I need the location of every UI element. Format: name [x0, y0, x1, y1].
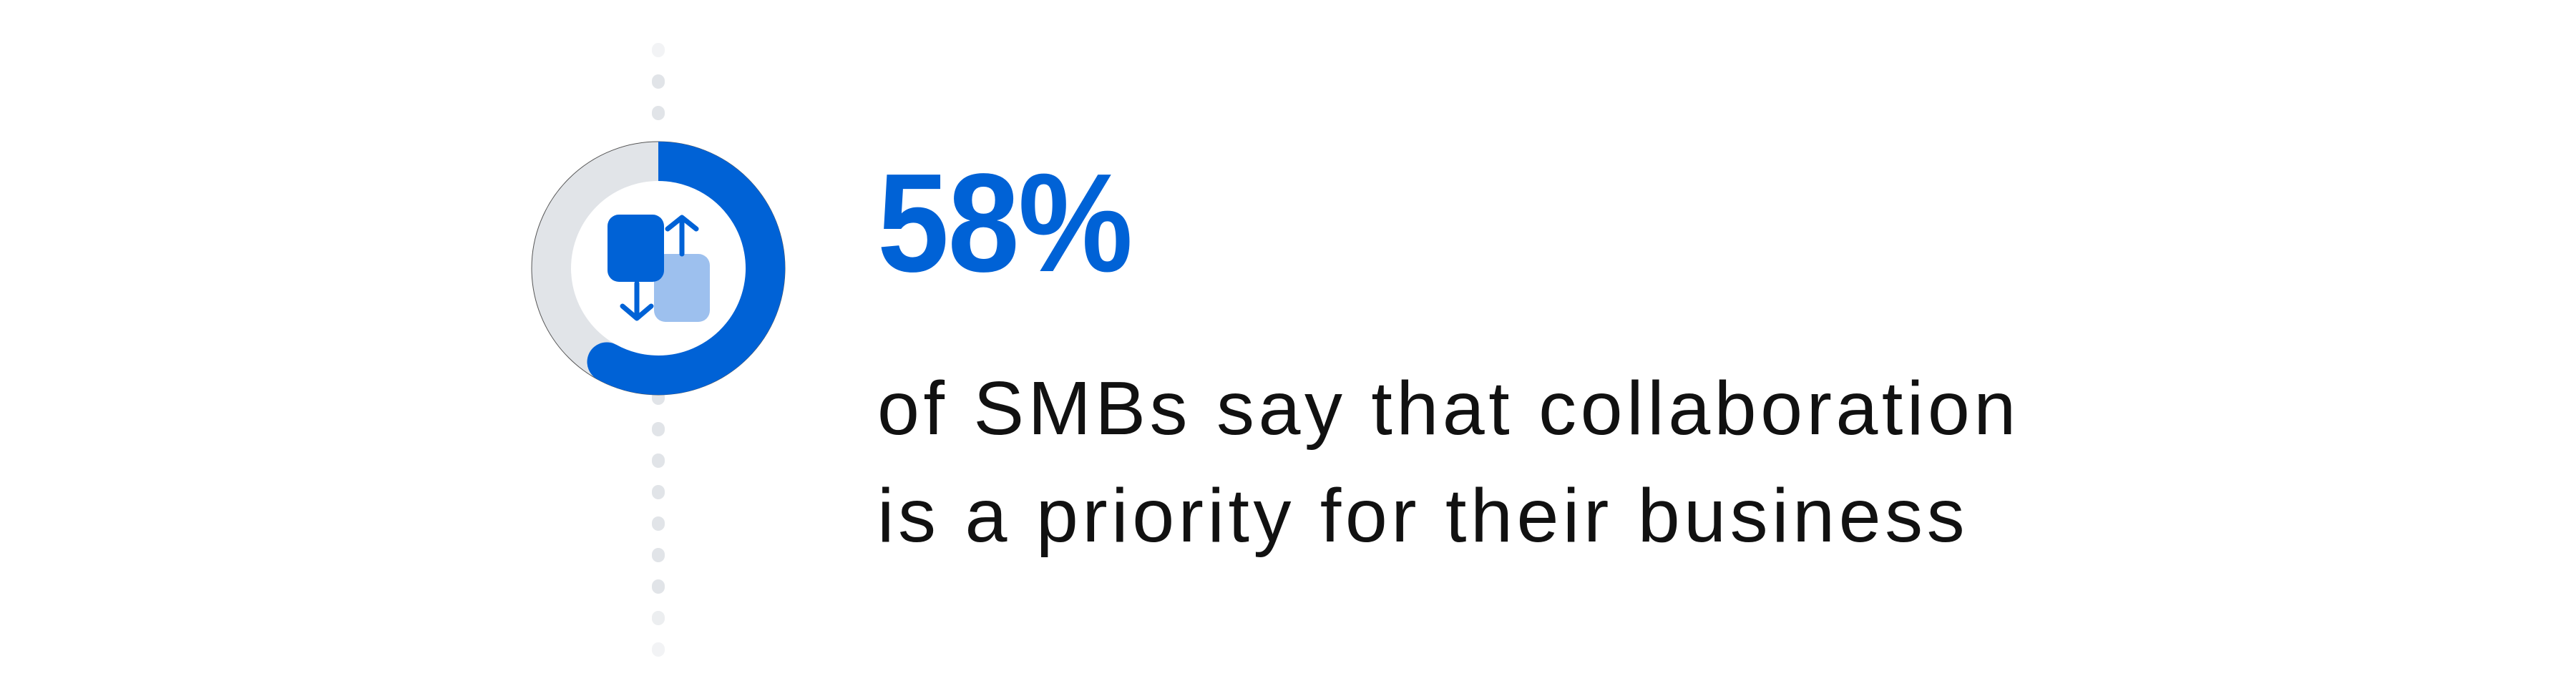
donut ring — [532, 142, 785, 395]
description text — [877, 366, 2020, 558]
description text: is a priority for their business — [877, 474, 1968, 558]
stat number: 58% — [877, 144, 1131, 301]
icon: collaboration boxes — [608, 215, 710, 322]
dotted timeline — [652, 43, 665, 657]
description text: of SMBs say that collaboration — [877, 366, 2020, 451]
